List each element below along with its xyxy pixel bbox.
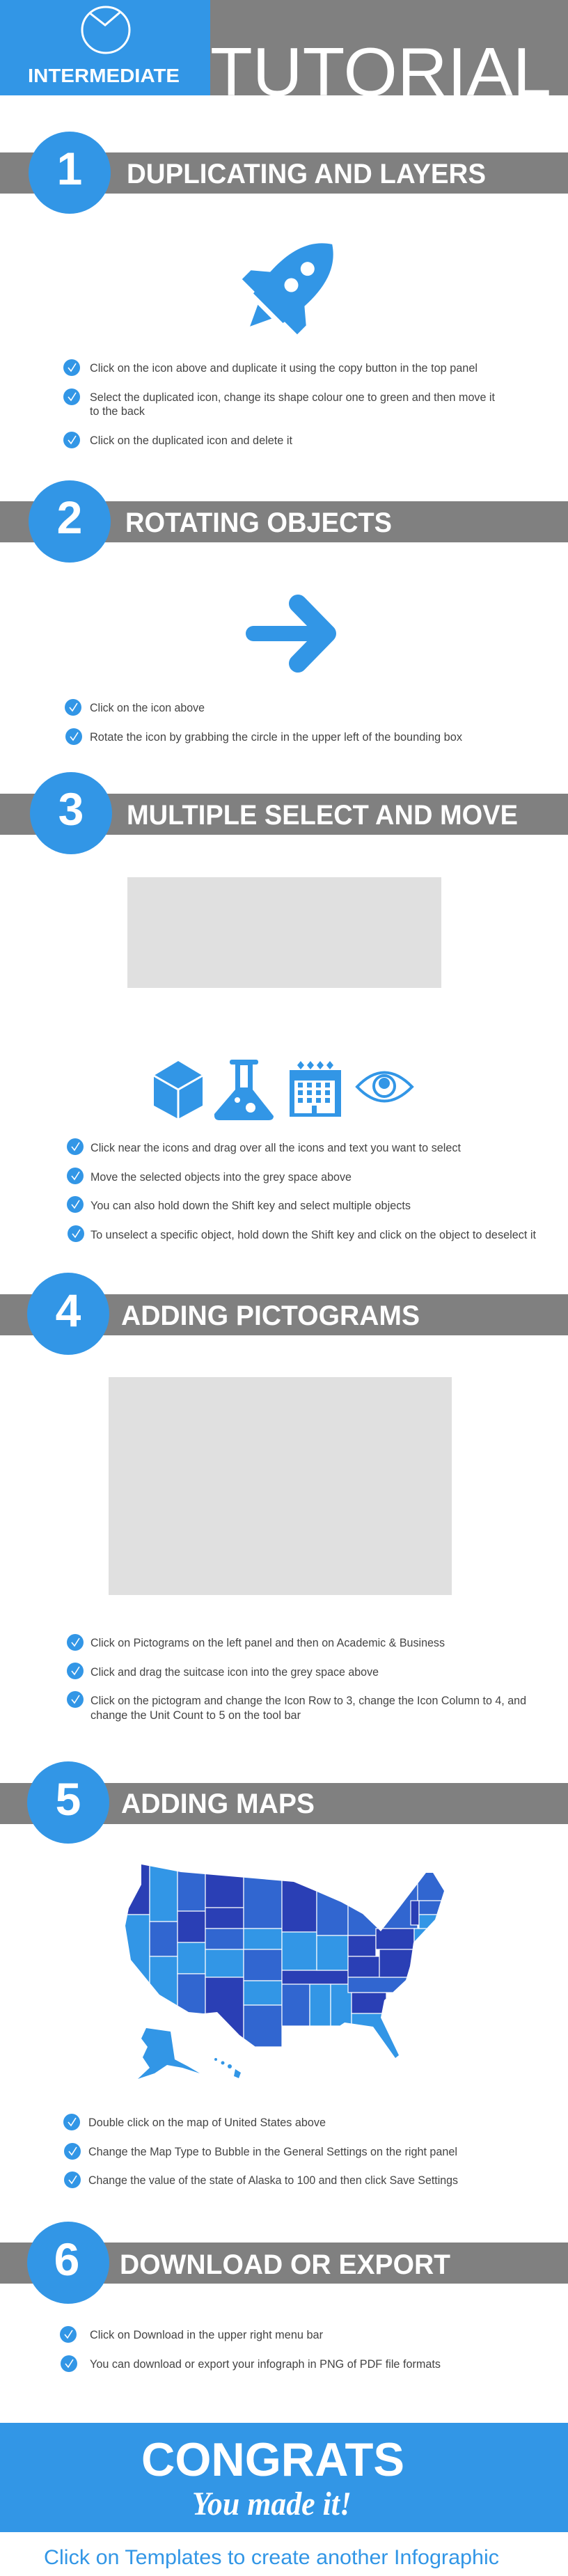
section 3 heading: MULTIPLE SELECT AND MOVE: [127, 800, 518, 831]
section 5 heading: ADDING MAPS: [121, 1789, 315, 1819]
footer call to action: Click on Templates to create another Infographic: [44, 2546, 499, 2569]
section 4 heading: ADDING PICTOGRAMS: [121, 1301, 420, 1331]
bullets section 5: [63, 2114, 458, 2188]
icon: building: [290, 1061, 341, 1117]
section 6 heading: 6: [54, 2233, 79, 2285]
bullets section 4: Click and drag the suitcase icon into the grey space above: [90, 1665, 379, 1679]
icon: eye: [357, 1072, 412, 1101]
bullets section 1: [63, 359, 495, 448]
bullets section 6: Click on Download in the upper right menu bar: [90, 2328, 323, 2341]
section 6 heading: [0, 2222, 568, 2304]
bullets section 6: You can download or export your infograph in PNG of PDF file formats: [90, 2357, 441, 2371]
section 6 heading: DOWNLOAD OR EXPORT: [120, 2249, 450, 2280]
bullets section 2: Rotate the icon by grabbing the circle in the upper left of the bounding box: [90, 730, 462, 744]
bullets section 1: Click on the duplicated icon and delete it: [90, 434, 292, 447]
section 4 heading: 4: [56, 1285, 81, 1336]
congrats banner: CONGRATS: [141, 2433, 404, 2486]
section 2 heading: 2: [57, 492, 82, 543]
section 4 heading: [0, 1273, 568, 1355]
section 3 heading: [0, 772, 568, 854]
title: TUTORIAL: [210, 33, 551, 110]
alaska: [138, 2028, 200, 2079]
bullets section 1: Click on the icon above and duplicate it using the copy button in the top panel: [90, 361, 478, 375]
section 1 heading: [0, 132, 568, 214]
bullets section 4: change the Unit Count to 5 on the tool bar: [90, 1709, 301, 1722]
icon: arrow: [253, 604, 327, 663]
hawaii: [214, 2058, 241, 2078]
grey drop area: [127, 877, 441, 988]
section 3 heading: 3: [58, 783, 84, 835]
icon: cube: [154, 1061, 203, 1119]
bullets section 4: Click on the pictogram and change the Icon Row to 3, change the Icon Column to 4, and: [90, 1694, 526, 1707]
bullets section 3: You can also hold down the Shift key and select multiple objects: [90, 1199, 411, 1212]
section 5 heading: 5: [56, 1773, 81, 1825]
section 1 heading: 1: [57, 143, 82, 194]
icons row: [154, 1060, 412, 1120]
bullets section 3: Move the selected objects into the grey space above: [90, 1170, 352, 1184]
section 2 heading: ROTATING OBJECTS: [125, 508, 392, 538]
bullets section 2: [65, 699, 462, 745]
bullets section 1: to the back: [90, 405, 145, 418]
bullets section 4: Click on Pictograms on the left panel and then on Academic & Business: [90, 1636, 445, 1649]
icon: flask: [214, 1060, 274, 1120]
bullets section 3: Click near the icons and drag over all the icons and text you want to select: [90, 1141, 461, 1154]
bullets section 1: Select the duplicated icon, change its shape colour one to green and then move it: [90, 391, 495, 404]
section 1 heading: DUPLICATING AND LAYERS: [127, 159, 486, 189]
bullets section 6: [60, 2326, 441, 2372]
icon: clock: [82, 7, 129, 53]
bullets section 4: [67, 1634, 526, 1722]
bullets section 3: To unselect a specific object, hold down the Shift key and click on the object to deselect it: [90, 1228, 536, 1241]
section 2 heading: [0, 480, 568, 563]
bullets section 3: [67, 1138, 536, 1242]
icon: rocket: [222, 217, 360, 354]
map: united states: [118, 1859, 447, 2079]
bullets section 5: Change the value of the state of Alaska to 100 and then click Save Settings: [88, 2174, 458, 2187]
subtitle: intermediate: INTERMEDIATE: [28, 65, 180, 86]
congrats banner: You made it!: [192, 2485, 352, 2522]
bullets section 2: Click on the icon above: [90, 701, 205, 714]
grey pictogram area: [109, 1377, 452, 1595]
congrats banner: [0, 2423, 568, 2532]
bullets section 5: Change the Map Type to Bubble in the General Settings on the right panel: [88, 2145, 457, 2158]
section 5 heading: [0, 1761, 568, 1844]
bullets section 5: Double click on the map of United States above: [88, 2116, 326, 2129]
header: [0, 0, 568, 110]
